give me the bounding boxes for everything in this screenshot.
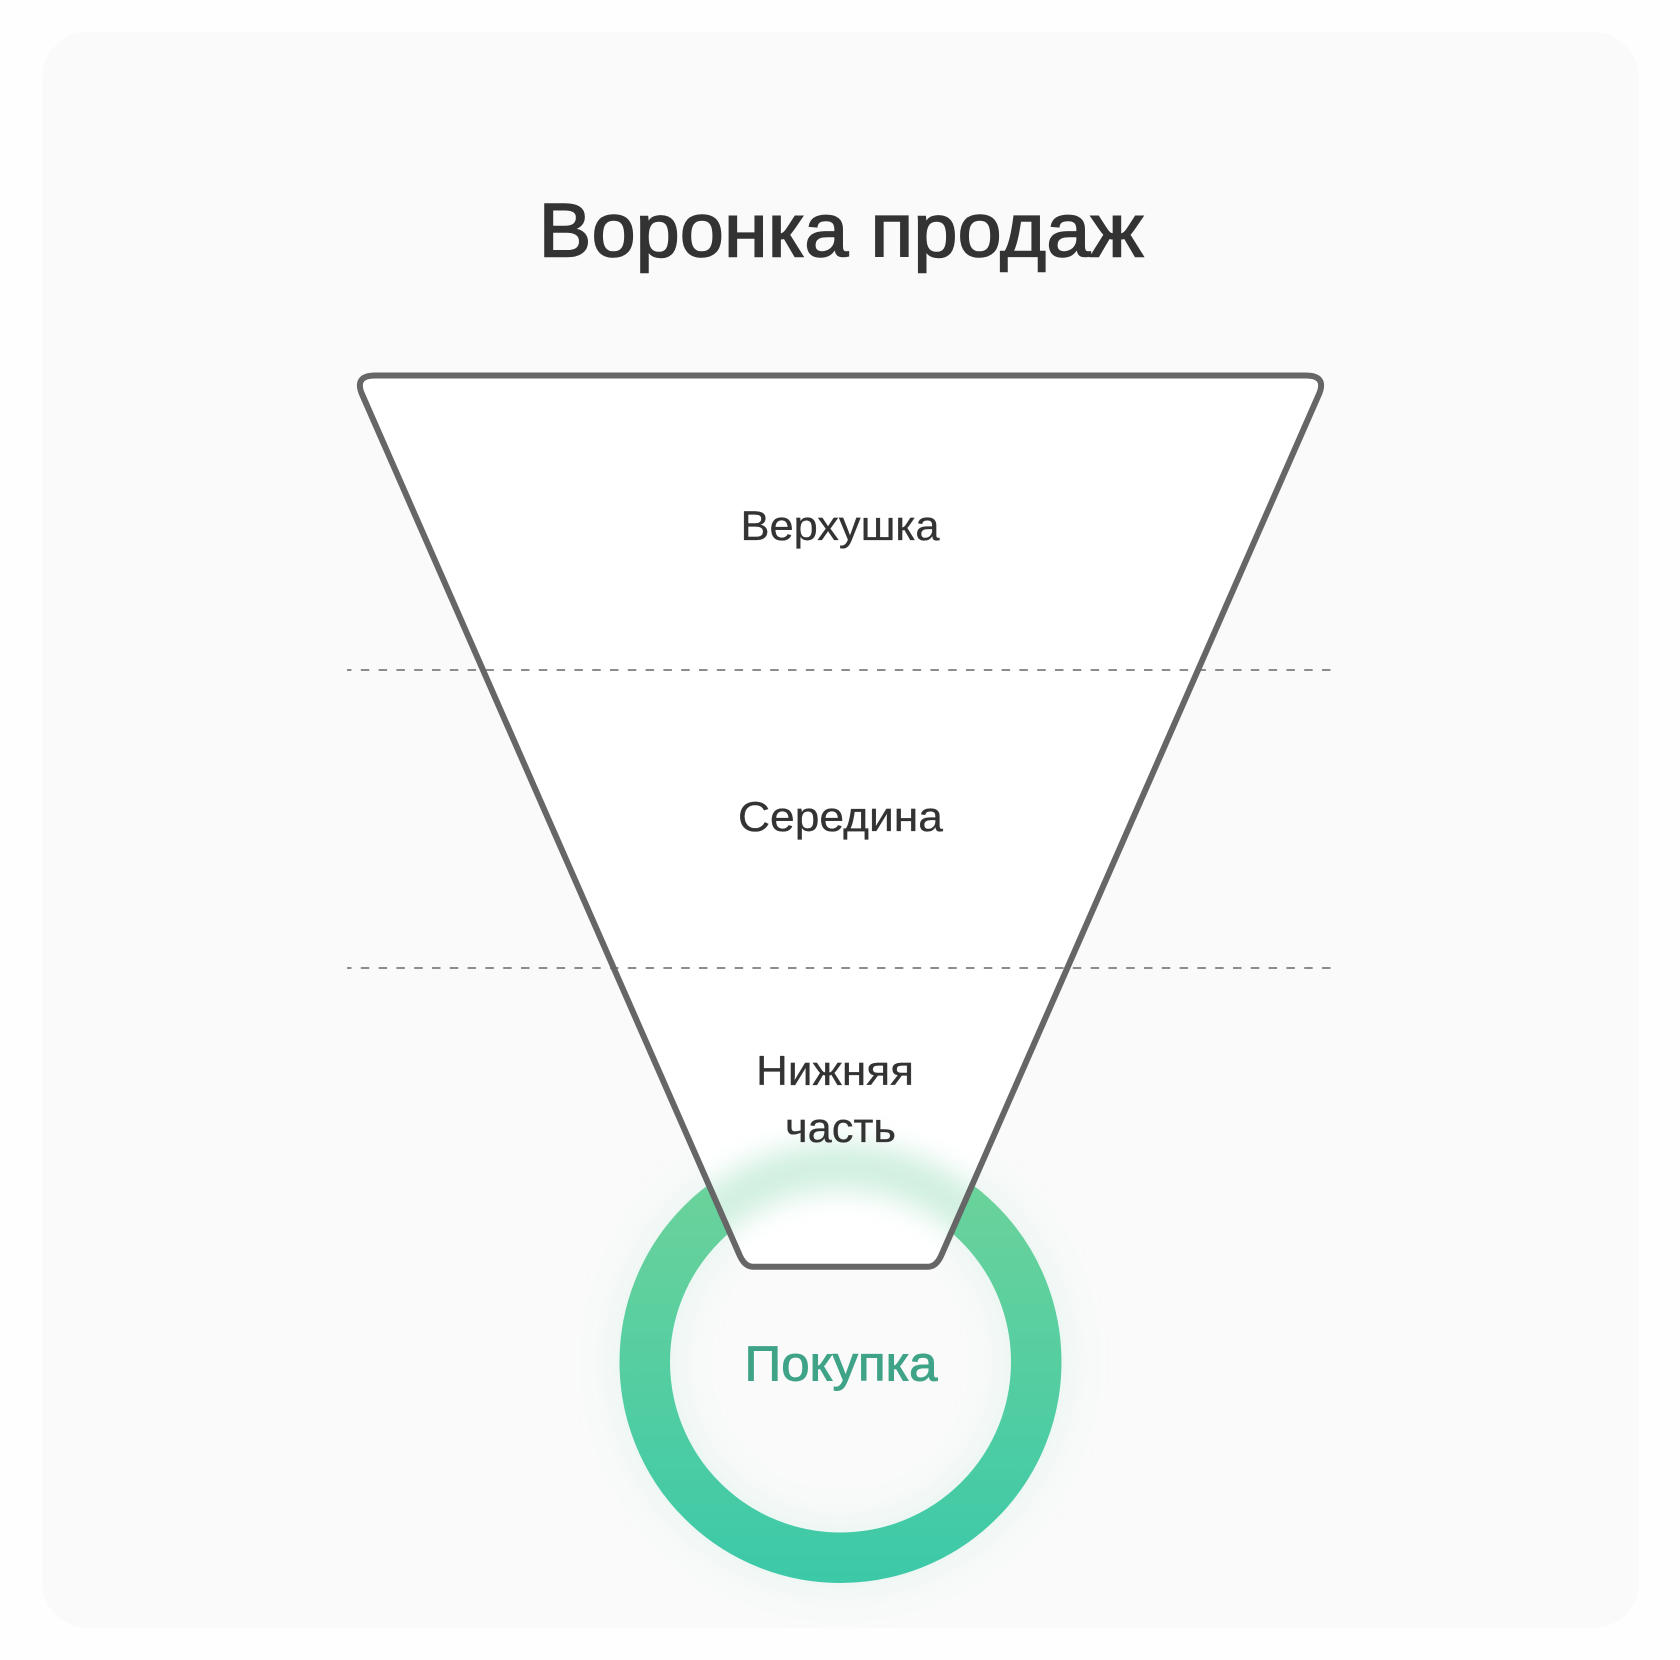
label: bottom of funnel <box>756 1047 914 1151</box>
title: Воронка продаж <box>538 188 1144 274</box>
funnel <box>356 372 1324 1270</box>
purchase ring <box>645 1166 1036 1558</box>
label: middle of funnel: Середина <box>738 793 944 840</box>
label: top of funnel: Верхушка <box>740 502 940 549</box>
dashed divider: middle and bottom <box>347 967 1334 969</box>
dashed divider: top and middle <box>347 669 1334 671</box>
label: bottom of funnel: часть <box>785 1104 896 1151</box>
label: purchase: Покупка <box>744 1338 938 1392</box>
label: bottom of funnel: Нижняя <box>756 1047 914 1094</box>
